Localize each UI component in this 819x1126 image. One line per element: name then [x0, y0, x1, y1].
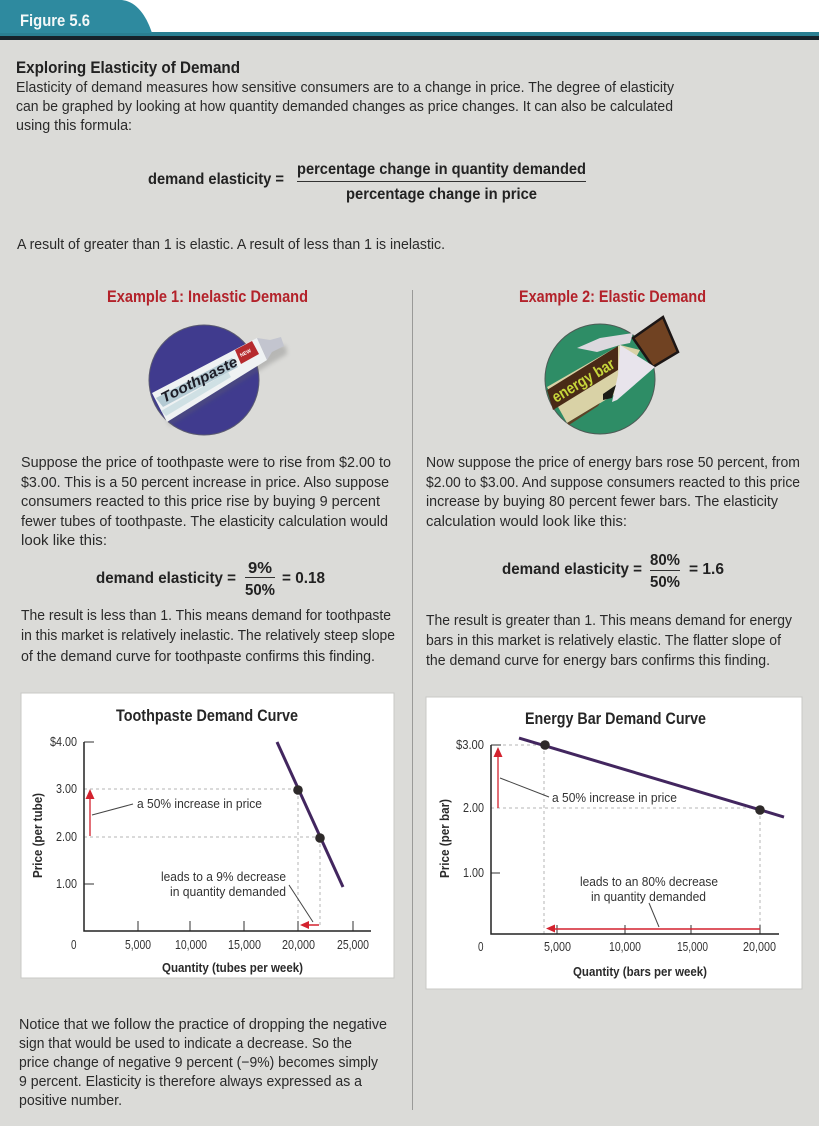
example 2 formula: = 1.6 — [689, 561, 724, 578]
y axis title: Price (per tube) — [31, 793, 45, 878]
icon: toothpaste — [149, 325, 287, 435]
main formula — [148, 161, 586, 203]
chart: toothpaste demand curve — [21, 693, 394, 978]
example 1 text: consumers reacted to this price rise by buying 9 percent — [21, 494, 380, 510]
y axis labels: 3.00 — [56, 782, 77, 796]
note text: Notice that we follow the practice of dropping the negative — [19, 1017, 387, 1033]
note text: positive number. — [19, 1093, 122, 1109]
x axis labels: 0 — [478, 940, 484, 954]
header band — [0, 0, 819, 40]
y axis labels: 2.00 — [463, 801, 484, 815]
example 1 text: look like this: — [21, 533, 107, 549]
note text: price change of negative 9 percent (−9%) becomes simply — [19, 1055, 379, 1071]
chart: energy bar demand curve — [426, 697, 802, 989]
y axis title: Price (per bar) — [438, 799, 452, 878]
result rule text: A result of greater than 1 is elastic. A result of less than 1 is inelastic. — [17, 237, 445, 253]
example 1 conclusion: The result is less than 1. This means demand for toothpaste — [21, 608, 391, 624]
icon: energy bar: energy bar — [549, 356, 618, 406]
intro text — [16, 80, 675, 134]
example 2 conclusion — [426, 613, 793, 669]
example 1 text — [21, 455, 391, 549]
example 2 formula: 80% — [650, 552, 680, 569]
x axis labels: 5,000 — [544, 940, 571, 954]
y axis labels — [456, 738, 484, 880]
example 2 conclusion: the demand curve for energy bars confirms this finding. — [426, 653, 770, 669]
note text: sign that would be used to indicate a decrease. So the — [19, 1036, 352, 1052]
x axis labels: 15,000 — [677, 940, 708, 954]
heading: Exploring Elasticity of Demand — [16, 59, 240, 77]
example 1 formula: 9% — [248, 560, 272, 577]
note text — [19, 1017, 387, 1109]
x axis labels: 25,000 — [337, 938, 369, 952]
example 1 conclusion: in this market is relatively inelastic. The relatively steep slope — [21, 628, 395, 644]
icon: toothpaste: NEW — [239, 348, 253, 359]
callout: price: a 50% increase in price — [552, 791, 677, 805]
x axis labels: 0 — [71, 938, 77, 952]
callout: price — [92, 797, 262, 815]
y axis labels: 1.00 — [56, 877, 77, 891]
example 1 formula — [96, 560, 325, 599]
example 1 text: $3.00. This is a 50 percent increase in price. Also suppose — [21, 475, 389, 491]
x axis labels: 20,000 — [282, 938, 315, 952]
figure tab — [0, 0, 152, 33]
callout: quantity: in quantity demanded — [170, 885, 286, 899]
main formula: percentage change in quantity demanded — [297, 161, 586, 178]
example 2 text: increase by buying 80 percent fewer bars. The elasticity — [426, 494, 779, 510]
example 1 formula: 50% — [245, 582, 275, 599]
demand curve — [277, 742, 343, 887]
demand curve — [519, 738, 784, 817]
intro text: using this formula: — [16, 118, 132, 134]
figure tab: Figure 5.6 — [20, 12, 90, 30]
y axis labels: $3.00 — [456, 738, 484, 752]
main formula: demand elasticity = — [148, 171, 284, 188]
example 2 formula: 50% — [650, 574, 680, 591]
panel: example 2 — [426, 288, 800, 669]
main formula: percentage change in price — [346, 186, 537, 203]
x axis labels: 20,000 — [743, 940, 776, 954]
chart title: Toothpaste Demand Curve — [116, 707, 298, 725]
intro text: can be graphed by looking at how quantity demanded changes as price changes. It can also be calculated — [16, 99, 673, 115]
arrow: quantity decrease — [546, 924, 760, 932]
arrow: price increase — [86, 789, 94, 836]
example 2 text: calculation would look like this: — [426, 514, 627, 530]
y axis labels: 1.00 — [463, 866, 484, 880]
intro text: Elasticity of demand measures how sensitive consumers are to a change in price. The degree of elasticity — [16, 80, 675, 96]
example 2 text — [426, 455, 800, 530]
example 2 formula: demand elasticity = — [502, 561, 642, 578]
note text: 9 percent. Elasticity is therefore always expressed as a — [19, 1074, 363, 1090]
example 2 text: $2.00 to $3.00. And suppose consumers reacted to this price — [426, 475, 800, 491]
callout: quantity — [161, 870, 313, 922]
x axis labels — [478, 940, 776, 954]
example 2 heading: Example 2: Elastic Demand — [519, 288, 706, 306]
example 2 formula — [502, 552, 724, 591]
icon: toothpaste: Toothpaste — [159, 354, 241, 407]
callout: price — [500, 778, 677, 805]
y axis labels: $4.00 — [50, 735, 77, 749]
callout: quantity — [580, 875, 718, 927]
callout: quantity: in quantity demanded — [591, 890, 706, 904]
callout: price: a 50% increase in price — [137, 797, 262, 811]
x axis labels — [71, 938, 369, 952]
x axis title: Quantity (tubes per week) — [162, 961, 303, 975]
arrow: price increase — [494, 747, 502, 808]
example 1 formula: = 0.18 — [282, 570, 325, 587]
arrow: quantity decrease — [300, 921, 319, 929]
chart title: Energy Bar Demand Curve — [525, 710, 706, 728]
example 2 text: Now suppose the price of energy bars rose 50 percent, from — [426, 455, 800, 471]
example 2 conclusion: The result is greater than 1. This means demand for energy — [426, 613, 793, 629]
x axis labels: 5,000 — [125, 938, 151, 952]
example 2 conclusion: bars in this market is relatively elastic. The flatter slope of — [426, 633, 782, 649]
panel: example 1 — [21, 288, 395, 665]
y axis labels: 2.00 — [56, 830, 77, 844]
y axis labels — [50, 735, 77, 891]
callout: quantity: leads to an 80% decrease — [580, 875, 718, 889]
x axis labels: 15,000 — [228, 938, 261, 952]
callout: quantity: leads to a 9% decrease — [161, 870, 286, 884]
x axis labels: 10,000 — [609, 940, 641, 954]
example 1 conclusion: of the demand curve for toothpaste confirms this finding. — [21, 649, 375, 665]
icon: energy bar — [545, 317, 678, 434]
example 1 text: Suppose the price of toothpaste were to rise from $2.00 to — [21, 455, 391, 471]
example 1 heading: Example 1: Inelastic Demand — [107, 288, 308, 306]
example 1 text: fewer tubes of toothpaste. The elasticity calculation would — [21, 514, 388, 530]
x axis labels: 10,000 — [175, 938, 207, 952]
x axis title: Quantity (bars per week) — [573, 965, 707, 979]
example 1 conclusion — [21, 608, 395, 665]
example 1 formula: demand elasticity = — [96, 570, 236, 587]
